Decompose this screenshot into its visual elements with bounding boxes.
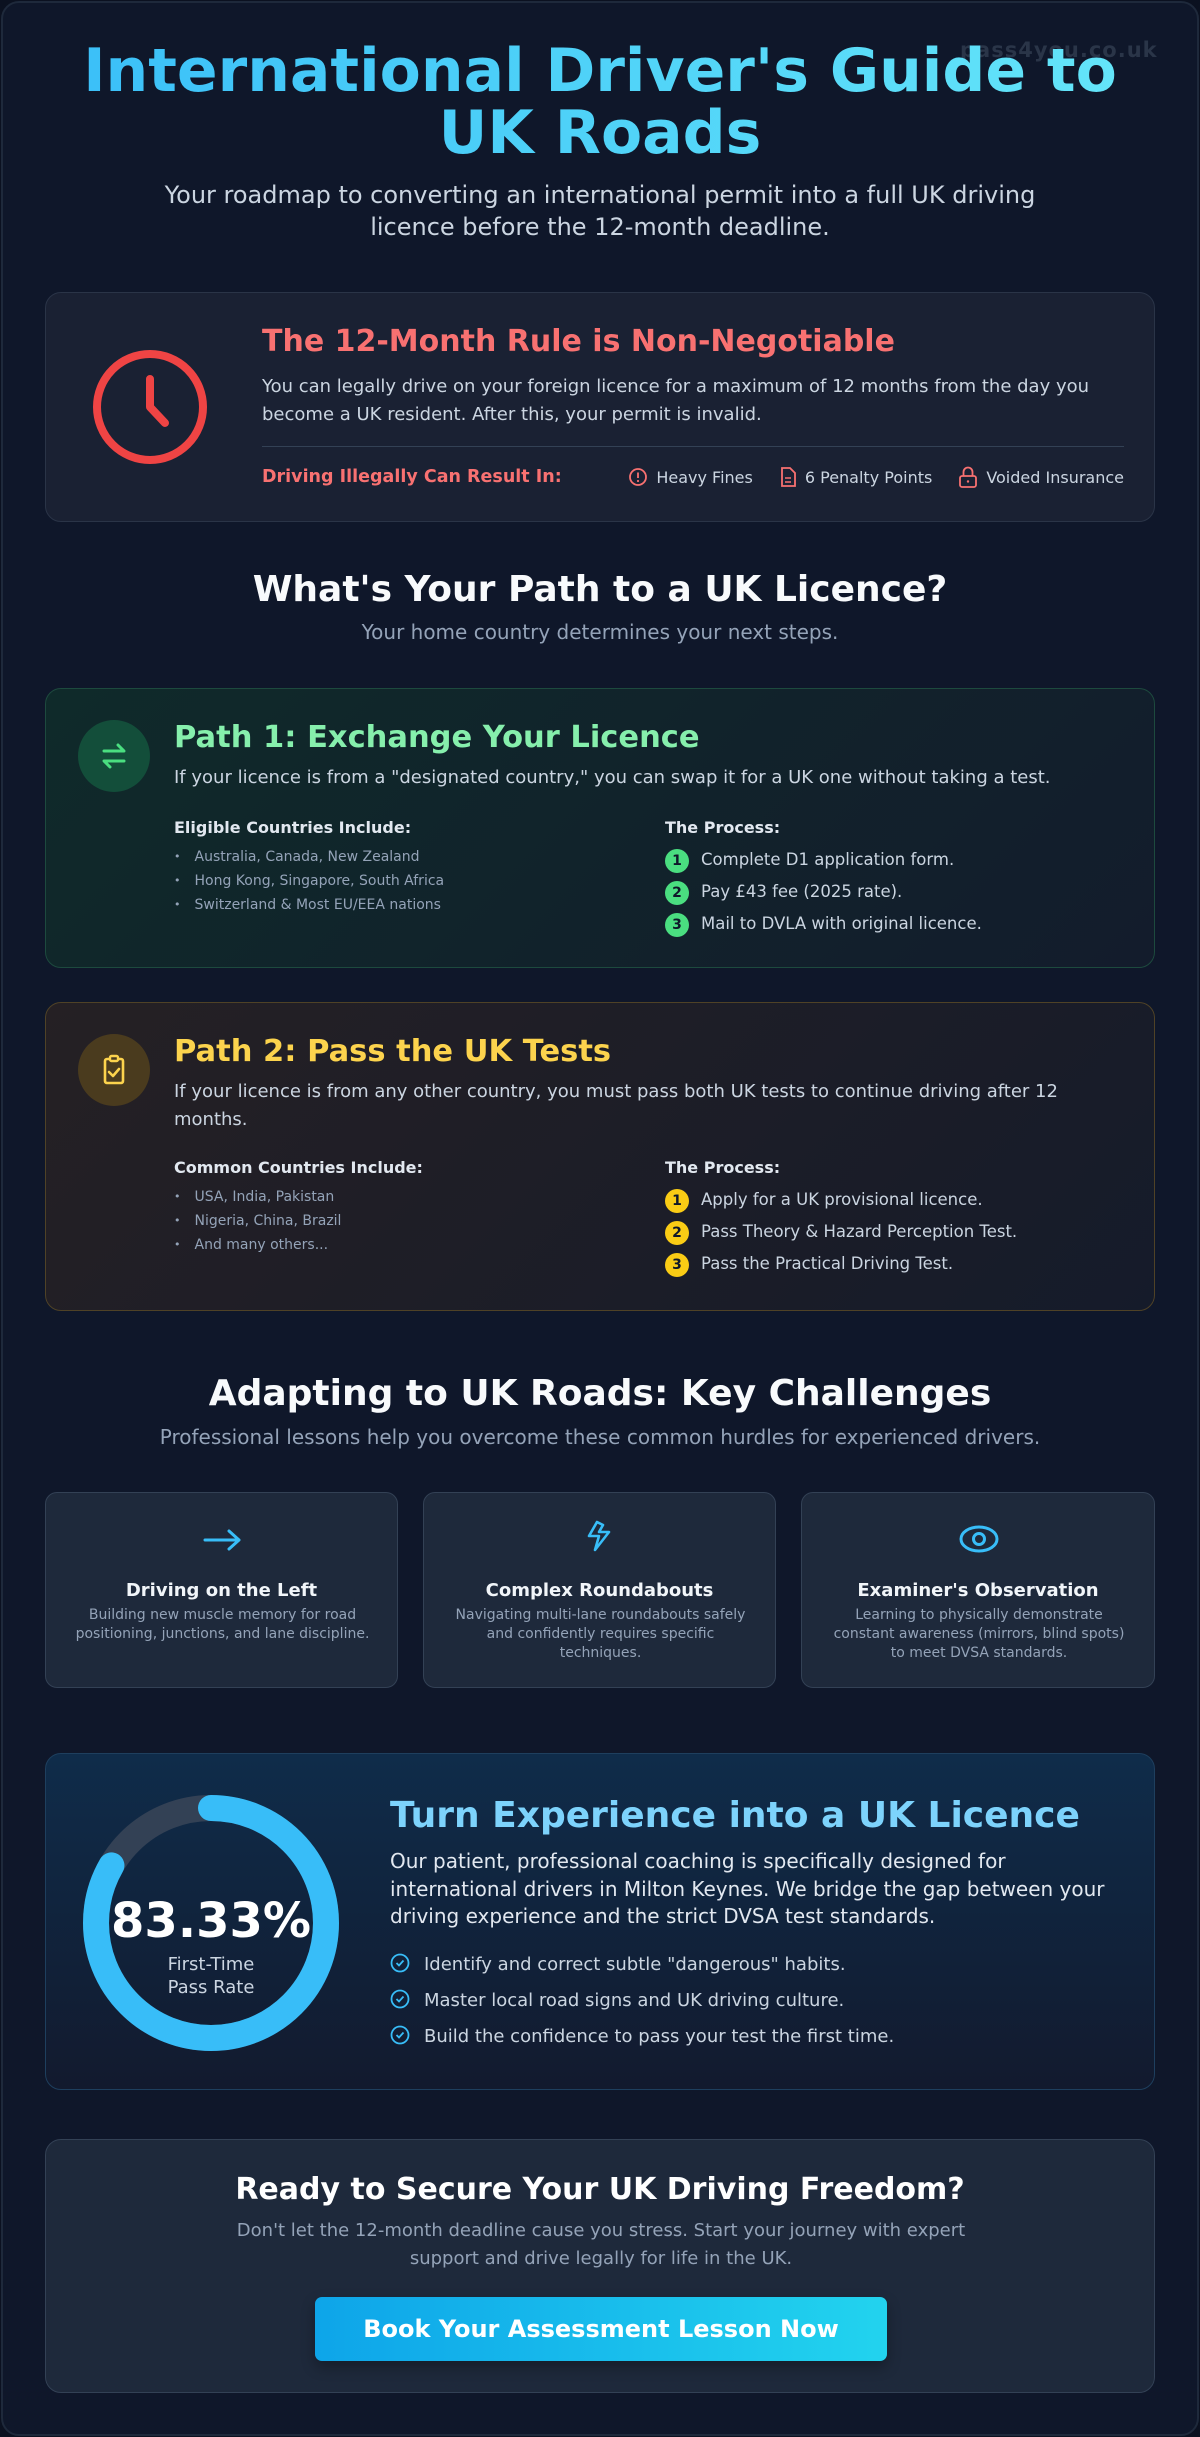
process steps: The Process:	[665, 1158, 780, 1177]
heading: Path 2: Pass the UK Tests	[174, 1034, 611, 1069]
title: Examiner's Observation	[857, 1580, 1099, 1601]
process steps: 3	[672, 916, 682, 932]
card: roundabouts	[423, 1492, 776, 1688]
icon: exchange	[78, 720, 150, 792]
description: If your licence is from any other country, you must pass both UK tests to continue driving after 12 months.	[174, 1081, 1058, 1130]
process steps	[665, 1158, 1017, 1277]
consequences row	[262, 466, 1124, 488]
description: Learning to physically demonstrate constant awareness (mirrors, blind spots) to meet DVSA standards.	[834, 1607, 1124, 1661]
common countries: Common Countries Include:	[174, 1158, 423, 1177]
process steps: Pass Theory & Hazard Perception Test.	[701, 1222, 1017, 1241]
process steps: 1	[672, 1192, 682, 1208]
eligible countries: Switzerland & Most EU/EEA nations	[194, 897, 441, 913]
common countries: And many others...	[194, 1237, 328, 1253]
title: Driving on the Left	[126, 1580, 317, 1601]
checklist: Master local road signs and UK driving culture.	[424, 1990, 844, 2011]
panel: pass rate	[45, 1753, 1155, 2090]
process steps	[665, 818, 982, 937]
common countries: USA, India, Pakistan	[194, 1189, 334, 1205]
process steps: Apply for a UK provisional licence.	[701, 1190, 983, 1209]
text: You can legally drive on your foreign licence for a maximum of 12 months from the day you become a UK resident. After this, your permit is invalid.	[262, 376, 1089, 425]
icon: arrow	[204, 1529, 241, 1551]
watermark: pass4you.co.uk	[960, 38, 1158, 62]
card: driving on the left	[45, 1492, 398, 1688]
item: insurance: Voided Insurance	[986, 468, 1124, 486]
panel: call to action	[45, 2139, 1155, 2393]
section heading: paths: What's Your Path to a UK Licence?	[253, 569, 947, 610]
item: fines: Heavy Fines	[656, 468, 753, 486]
process steps: 2	[672, 884, 682, 900]
subtitle: Your roadmap to converting an international permit into a full UK driving licence before the 12-month deadline.	[165, 181, 1035, 241]
process steps: Mail to DVLA with original licence.	[701, 914, 982, 933]
checklist: Build the confidence to pass your test the first time.	[424, 2026, 894, 2047]
process steps: Pass the Practical Driving Test.	[701, 1254, 953, 1273]
common countries: Nigeria, China, Brazil	[194, 1213, 341, 1229]
consequences row: Driving Illegally Can Result In:	[262, 467, 562, 487]
icon: eye	[960, 1526, 998, 1552]
button: Book Your Assessment Lesson Now	[363, 2315, 839, 2343]
title	[0, 40, 1200, 164]
title: UK Roads	[439, 98, 761, 168]
description: If your licence is from a "designated country," you can swap it for a UK one without taking a test.	[174, 767, 1051, 788]
process steps: The Process:	[665, 818, 780, 837]
eligible countries: Hong Kong, Singapore, South Africa	[194, 873, 444, 889]
heading: The 12-Month Rule is Non-Negotiable	[262, 324, 895, 359]
checklist: Identify and correct subtle "dangerous" habits.	[424, 1954, 846, 1975]
panel: 12-month rule	[45, 292, 1155, 522]
eligible countries	[174, 818, 444, 913]
section subheading: Your home country determines your next steps.	[362, 620, 838, 644]
process steps: 3	[672, 1256, 682, 1272]
stat label	[168, 1954, 254, 1998]
process steps: Pay £43 fee (2025 rate).	[701, 882, 902, 901]
eligible countries: Australia, Canada, New Zealand	[194, 849, 420, 865]
eligible countries: Eligible Countries Include:	[174, 818, 411, 837]
stat label: Pass Rate	[168, 1977, 254, 1998]
description: Building new muscle memory for road positioning, junctions, and lane discipline.	[76, 1607, 369, 1642]
icon: lightning	[588, 1520, 610, 1552]
description: Navigating multi-lane roundabouts safely and confidently requires specific techniques.	[456, 1607, 745, 1661]
donut chart	[83, 1795, 339, 2051]
common countries	[174, 1158, 423, 1253]
item: points: 6 Penalty Points	[805, 468, 932, 486]
paragraph: Our patient, professional coaching is specifically designed for international drivers in Milton Keynes. We bridge the gap between your driving experience and the strict DVSA test standards.	[390, 1849, 1105, 1928]
process steps: 2	[672, 1224, 682, 1240]
card: observation	[801, 1492, 1155, 1688]
process steps: Complete D1 application form.	[701, 850, 954, 869]
stat value: 83.33%	[111, 1893, 311, 1949]
icon: clock	[93, 350, 207, 464]
panel: path 2	[45, 1002, 1155, 1311]
section subheading: Professional lessons help you overcome these common hurdles for experienced drivers.	[160, 1425, 1040, 1449]
heading: Ready to Secure Your UK Driving Freedom?	[235, 2172, 965, 2207]
stat label: First-Time	[168, 1954, 254, 1975]
section heading: challenges: Adapting to UK Roads: Key Challenges	[209, 1373, 991, 1414]
heading: Path 1: Exchange Your Licence	[174, 720, 700, 755]
text: Don't let the 12-month deadline cause you stress. Start your journey with expert support and drive legally for life in the UK.	[237, 2220, 965, 2269]
title: Complex Roundabouts	[486, 1580, 713, 1601]
panel: path 1	[45, 688, 1155, 968]
heading: Turn Experience into a UK Licence	[390, 1795, 1080, 1836]
button	[315, 2297, 887, 2361]
checklist	[390, 1954, 894, 2047]
title: International Driver's Guide to	[83, 36, 1117, 106]
icon: clipboard	[78, 1034, 150, 1106]
process steps: 1	[672, 852, 682, 868]
